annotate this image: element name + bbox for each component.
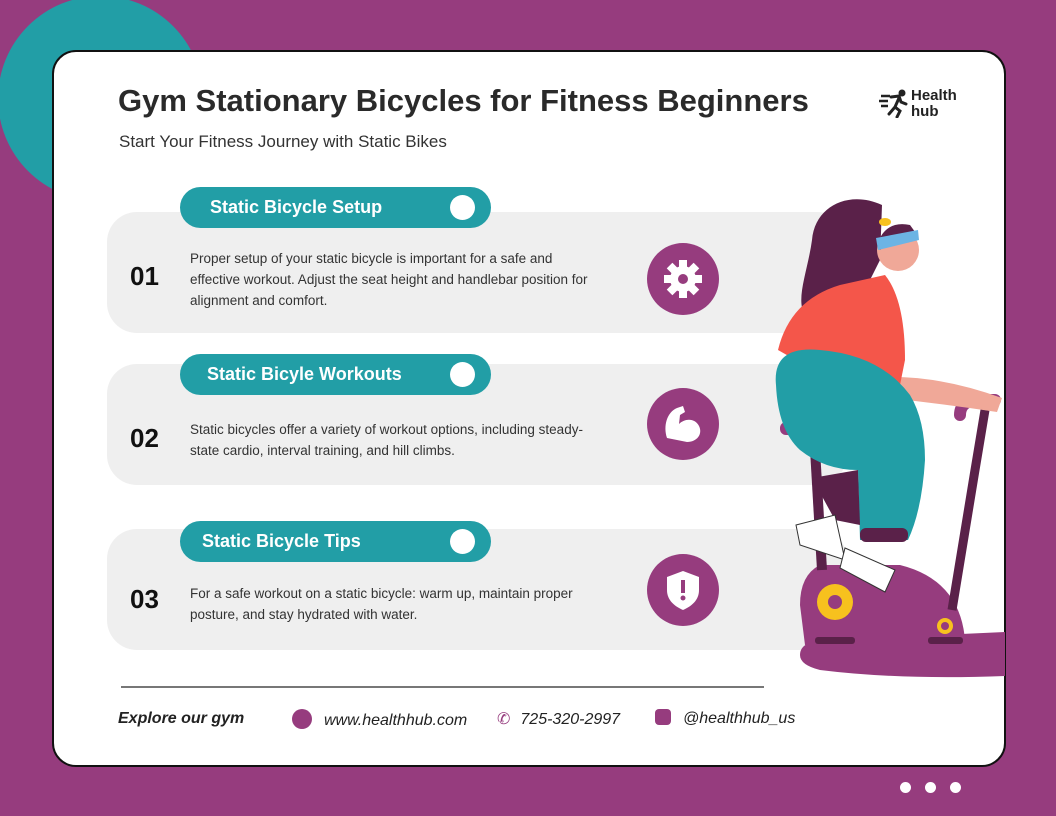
text 3: For a safe workout on a static bicycle: warm up, maintain proper posture, and stay hydrated with water.: [190, 586, 573, 622]
pill 1: [180, 187, 491, 228]
divider: [121, 686, 764, 688]
subtitle: Start Your Fitness Journey with Static Bikes: [119, 132, 447, 151]
title: Gym Stationary Bicycles for Fitness Beginners: [118, 83, 809, 118]
decorative teal circle: [0, 0, 203, 201]
pill 3: [180, 521, 491, 562]
number 03: 03: [130, 584, 159, 614]
icon: gear: [647, 243, 719, 315]
dots: [900, 782, 961, 793]
number 02: 02: [130, 423, 159, 453]
text 2: Static bicycles offer a variety of workout options, including steady-state cardio, interval training, and hill climbs.: [190, 422, 583, 458]
text 1: Proper setup of your static bicycle is important for a safe and effective workout. Adjust the seat height and handlebar position for alignment and comfort.: [190, 251, 588, 308]
number 01: 01: [130, 261, 159, 291]
footer: instagram: @healthhub_us: [683, 710, 795, 727]
footer: explore: Explore our gym: [118, 710, 244, 727]
pill 2: Static Bicyle Workouts: [207, 364, 402, 384]
row 3: [107, 529, 847, 650]
logo: Health: [911, 87, 957, 104]
footer: phone: ✆ 725-320-2997: [497, 711, 620, 728]
icon: muscle: [647, 388, 719, 460]
logo: hub: [911, 103, 938, 120]
pill 1: Static Bicycle Setup: [210, 197, 382, 217]
pill 3: Static Bicycle Tips: [202, 531, 361, 551]
pill 2: [180, 354, 491, 395]
footer: website: www.healthhub.com: [324, 712, 467, 729]
main card: [52, 50, 1006, 767]
logo: [879, 87, 957, 120]
illustration: woman on stationary bike: [776, 199, 1005, 678]
footer: website: [292, 709, 467, 729]
row 1: [107, 212, 847, 333]
icon: shield: [647, 554, 719, 626]
row 2: [107, 364, 847, 485]
